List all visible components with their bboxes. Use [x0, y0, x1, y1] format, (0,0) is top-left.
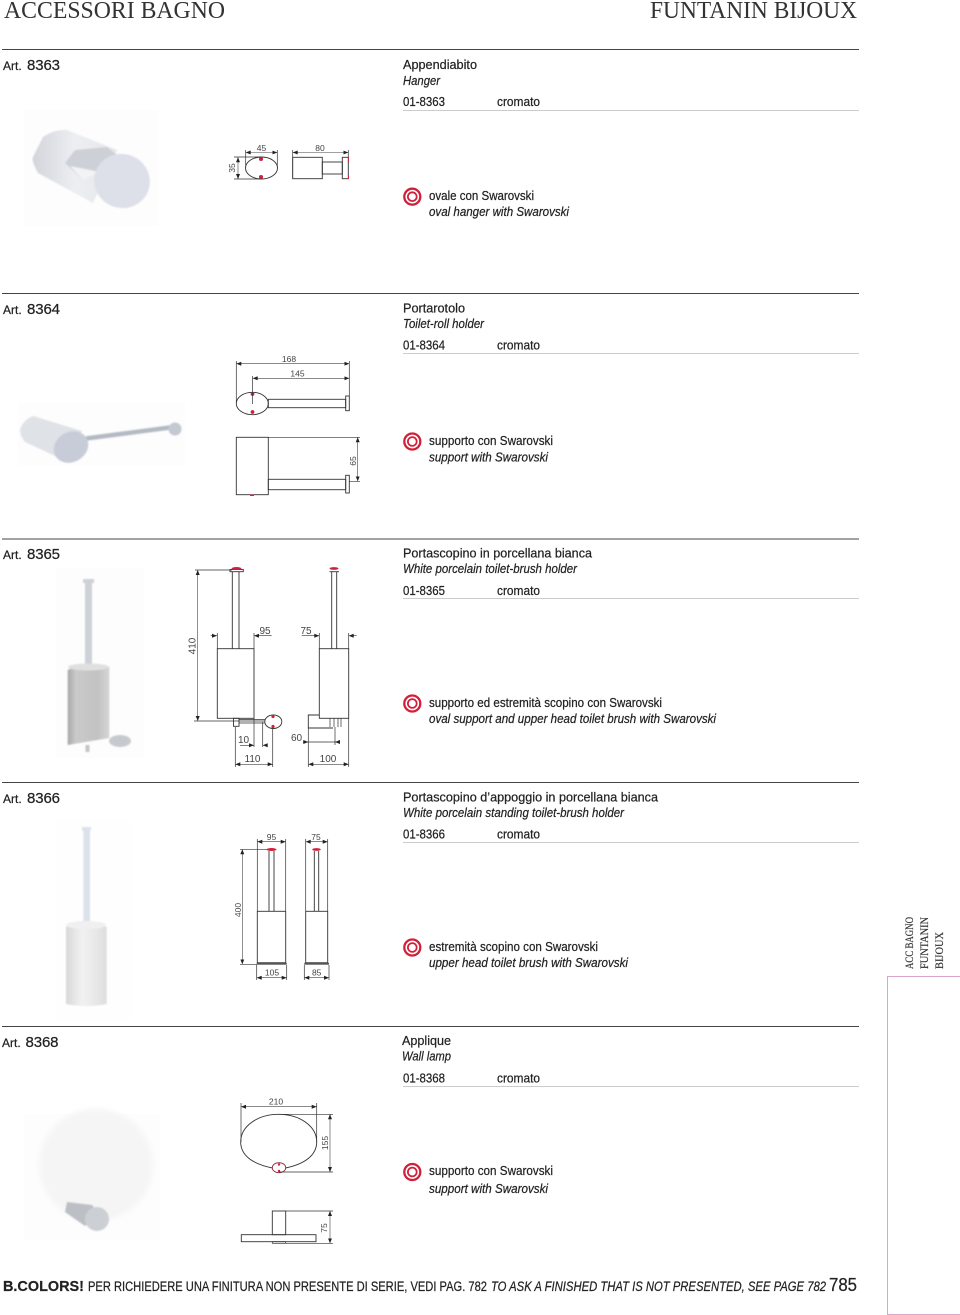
product photo: toilet-roll holder [18, 403, 185, 469]
article code and finish: cromato [497, 1070, 540, 1086]
technical drawing: wall lamp: 155 [320, 1136, 330, 1150]
article code and finish: 01-8365 [403, 583, 445, 598]
article number 8366: 8366 [27, 790, 60, 807]
icon: Swarovski target [404, 189, 420, 205]
article code and finish: 01-8366 [403, 826, 445, 842]
article number 8363: Art. [3, 59, 25, 73]
article code and finish: cromato [497, 338, 540, 352]
article number 8365: 8365 [27, 546, 60, 563]
article code and finish: cromato [497, 94, 540, 109]
article number 8368: Art. [2, 1036, 24, 1050]
technical drawing: standing toilet-brush holder: 85 [312, 968, 322, 978]
technical drawing: standing toilet-brush holder: 400 [233, 903, 243, 917]
technical drawing: wall toilet-brush holder: 100 [320, 754, 337, 765]
product photo: wall toilet-brush holder [56, 568, 144, 758]
technical drawing: hanger: 45 [257, 143, 266, 153]
side tab: category labels: ACC BAGNO [902, 917, 916, 969]
article number 8366: Art. [3, 792, 25, 806]
Swarovski note: upper head toilet brush with Swarovski [429, 955, 629, 970]
Swarovski note [429, 1163, 553, 1196]
article code and finish: cromato [497, 826, 540, 842]
technical drawing: standing toilet-brush holder: 75 [311, 832, 321, 842]
product name English: Toilet-roll holder [403, 316, 485, 331]
technical drawing: standing toilet-brush holder: 105 [265, 968, 279, 978]
article code and finish [403, 583, 540, 598]
side tab: pink outlined box [888, 976, 960, 1314]
technical drawing: standing toilet-brush holder: 95 [267, 832, 276, 842]
Swarovski note [429, 939, 629, 970]
technical drawing: toilet-roll holder: 145 [290, 368, 305, 378]
panel: article 8365 wall toilet-brush holder [2, 539, 859, 767]
product photo: hanger [24, 110, 158, 226]
article number 8364: Art. [3, 303, 25, 317]
footer note [3, 1275, 857, 1295]
article code and finish [403, 94, 540, 109]
product name English: Wall lamp [402, 1048, 451, 1064]
page number: 785 [829, 1275, 857, 1295]
technical drawing: wall lamp: 75 [319, 1223, 329, 1233]
article code and finish [403, 1070, 540, 1086]
icon: Swarovski target [404, 434, 420, 450]
technical drawing: toilet-roll holder: 168 [282, 354, 296, 364]
product name: Applique [402, 1033, 451, 1048]
icon: Swarovski target [404, 940, 420, 956]
panel: article 8363 hanger [2, 50, 859, 226]
Swarovski note [429, 433, 553, 464]
side tab: category labels [902, 917, 946, 969]
article number 8368: 8368 [26, 1034, 58, 1051]
Swarovski note [429, 188, 570, 219]
article code and finish [403, 338, 540, 352]
technical drawing: wall toilet-brush holder: 10 [238, 735, 249, 746]
Swarovski note: oval support and upper head toilet brush with Swarovski [429, 711, 717, 726]
side tab: category labels: BIJOUX [932, 932, 946, 969]
Swarovski note: support with Swarovski [429, 450, 549, 464]
Italian note: PER RICHIEDERE UNA FINITURA NON PRESENTE DI SERIE, VEDI PAG. 782 [88, 1279, 487, 1294]
Swarovski note: supporto con Swarovski [429, 433, 553, 448]
product name English: Hanger [403, 73, 441, 88]
product name: Portarotolo [403, 300, 465, 316]
brand note: B.COLORS! [3, 1278, 84, 1295]
technical drawing: wall toilet-brush holder: 95 [259, 626, 271, 637]
technical drawing: wall toilet-brush holder: 410 [188, 637, 198, 654]
article number 8364: 8364 [27, 301, 60, 318]
technical drawing: wall lamp: 210 [269, 1096, 283, 1106]
technical drawing: wall toilet-brush holder [188, 567, 357, 767]
technical drawing: wall toilet-brush holder: 60 [291, 733, 302, 744]
English note: TO ASK A FINISHED THAT IS NOT PRESENTED, SEE PAGE 782 [491, 1279, 826, 1294]
product name: Appendiabito [403, 57, 477, 72]
technical drawing: wall lamp [241, 1096, 333, 1243]
article number 8365: Art. [3, 548, 25, 562]
panel: article 8368 wall lamp [2, 1026, 859, 1243]
Swarovski note: support with Swarovski [429, 1181, 549, 1196]
article code and finish: 01-8363 [403, 94, 445, 109]
product name English: White porcelain standing toilet-brush holder [403, 805, 625, 820]
technical drawing: wall toilet-brush holder: 75 [300, 626, 312, 637]
product name English: White porcelain toilet-brush holder [403, 561, 578, 576]
article code and finish: 01-8368 [403, 1070, 445, 1086]
product name: Portascopino in porcellana bianca [403, 546, 593, 560]
Swarovski note: oval hanger with Swarovski [429, 204, 570, 219]
technical drawing: wall toilet-brush holder: 110 [245, 754, 261, 765]
panel: article 8366 standing toilet-brush holder [2, 782, 859, 1020]
Swarovski note: supporto con Swarovski [429, 1163, 553, 1178]
product name: Portascopino d’appoggio in porcellana bianca [403, 790, 659, 804]
technical drawing: hanger: 80 [315, 143, 325, 153]
Swarovski note [429, 695, 717, 726]
technical drawing: standing toilet-brush holder [233, 832, 329, 980]
product photo: wall lamp [24, 1109, 160, 1240]
technical drawing: toilet-roll holder [236, 354, 360, 496]
icon: Swarovski target [404, 1164, 420, 1180]
article code and finish [403, 826, 540, 842]
icon: Swarovski target [404, 696, 420, 712]
technical drawing: hanger [227, 143, 349, 179]
Swarovski note: estremità scopino con Swarovski [429, 939, 598, 954]
technical drawing: hanger: 35 [227, 163, 237, 173]
product photo: standing toilet-brush holder [56, 820, 132, 1020]
article number 8363: 8363 [27, 57, 60, 74]
side tab: category labels: FUNTANIN [917, 917, 931, 969]
article code and finish: cromato [497, 583, 540, 598]
Swarovski note: supporto ed estremità scopino con Swarovski [429, 695, 662, 710]
technical drawing: toilet-roll holder: 65 [348, 456, 358, 466]
article code and finish: 01-8364 [403, 338, 445, 352]
panel: article 8364 toilet-roll holder [2, 294, 859, 496]
Swarovski note: ovale con Swarovski [429, 188, 534, 203]
